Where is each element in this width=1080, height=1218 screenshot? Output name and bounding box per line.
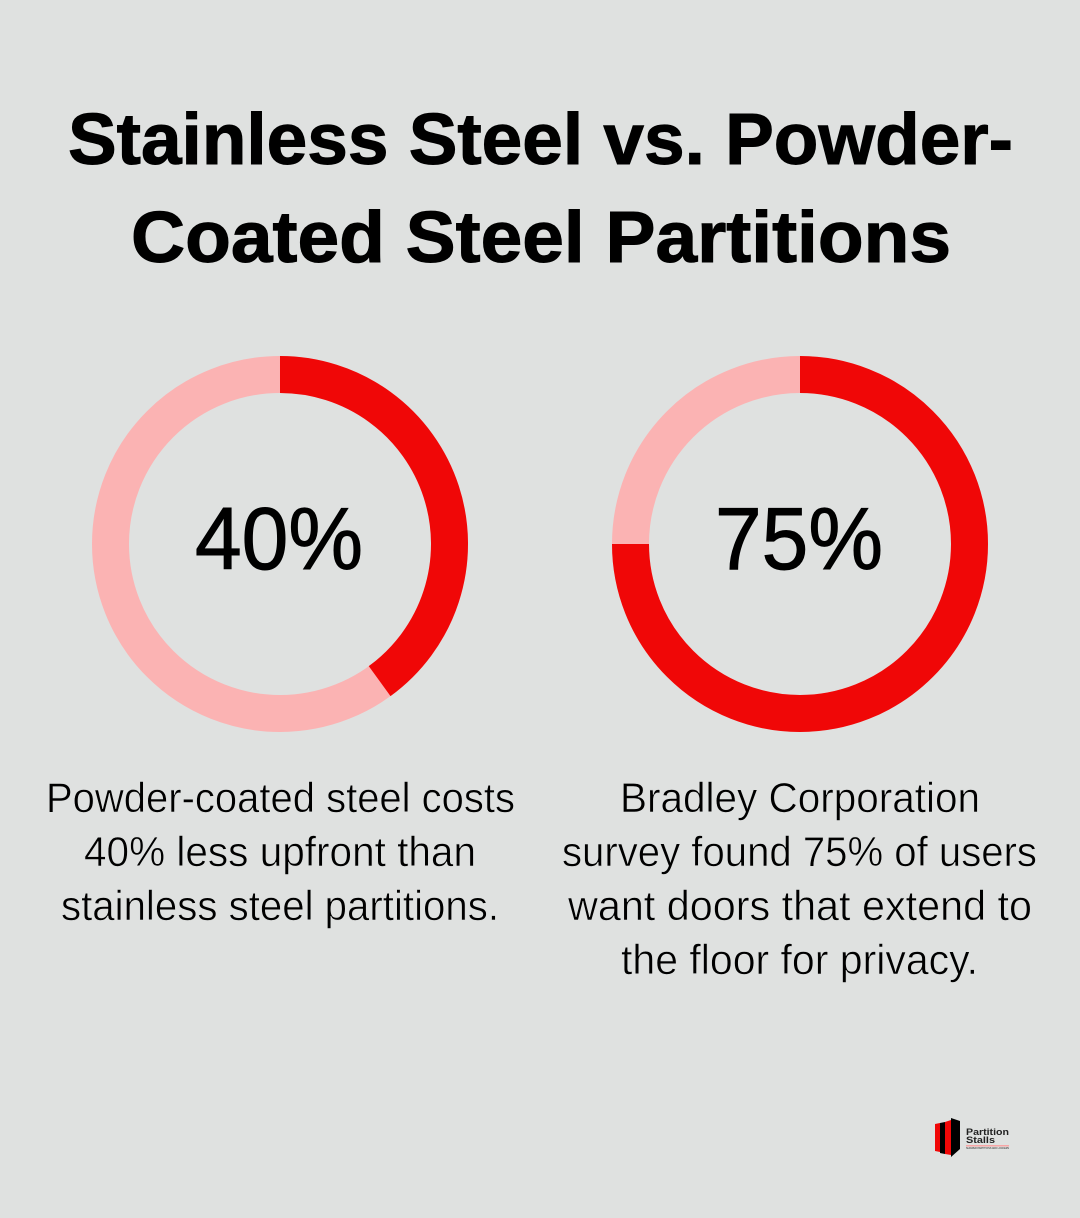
- logo wordmark: [966, 1127, 1009, 1150]
- text block: 40% description: 40% less upfront than: [84, 828, 476, 875]
- donut track: [630, 374, 970, 714]
- logo wordmark: SHOWER PARTITIONS AND LOCKERS: [966, 1146, 1009, 1150]
- icon: partition panels: [935, 1118, 960, 1157]
- text block: 75% description: the floor for privacy.: [621, 936, 978, 983]
- text block: 75% description: [562, 774, 1037, 983]
- donut chart: 40%: [110, 374, 450, 714]
- donut value arc 40%: [280, 374, 450, 681]
- donut value arc 75%: [630, 374, 969, 713]
- text block: 75% description: want doors that extend to: [567, 882, 1032, 929]
- logo wordmark: Partition: [966, 1127, 1009, 1137]
- value label 75%: 75%: [715, 489, 883, 588]
- logo wordmark: Stalls: [966, 1135, 995, 1145]
- text block: 75% description: Bradley Corporation: [620, 774, 980, 821]
- title: Coated Steel Partitions: [131, 198, 951, 278]
- text block: 40% description: [46, 774, 515, 929]
- value label 40%: 40%: [195, 489, 363, 588]
- title: Stainless Steel vs. Powder-: [68, 100, 1013, 180]
- donut chart: 75%: [630, 374, 970, 714]
- text block: 75% description: survey found 75% of users: [562, 828, 1037, 875]
- text block: 40% description: Powder-coated steel costs: [46, 774, 515, 821]
- donut track: [110, 374, 450, 714]
- logo: Partition Stalls: [935, 1118, 1009, 1157]
- title: [68, 100, 1013, 278]
- text block: 40% description: stainless steel partitions.: [61, 882, 499, 929]
